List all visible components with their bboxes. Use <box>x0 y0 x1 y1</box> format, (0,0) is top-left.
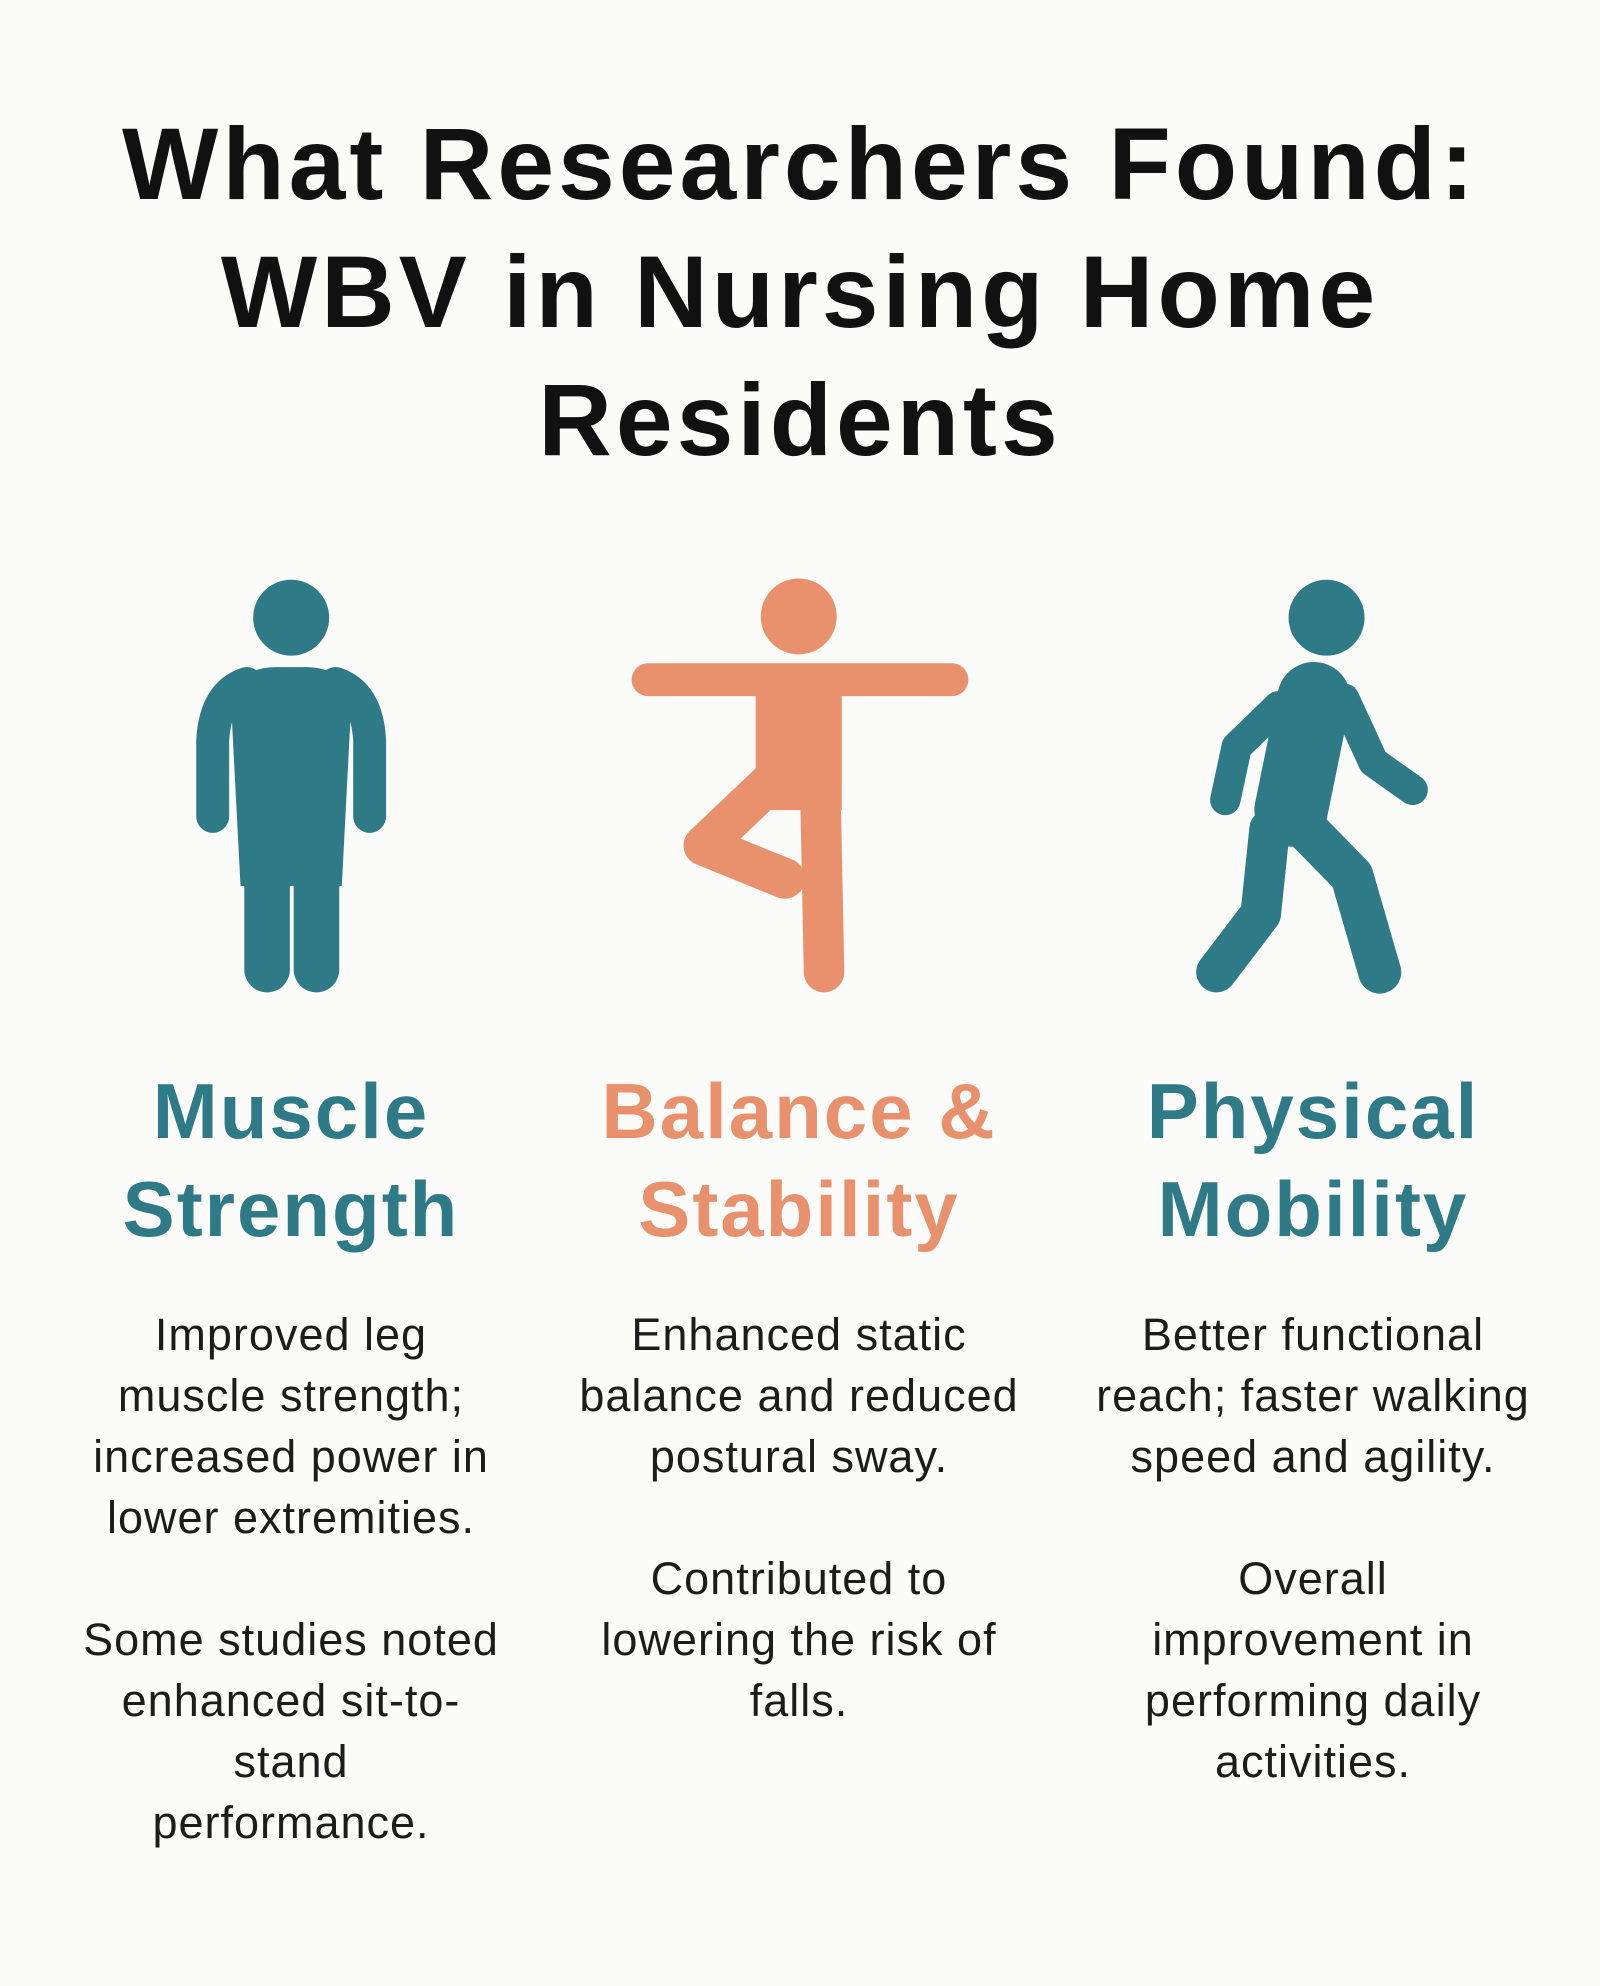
text: balance: Contributed to <box>651 1553 947 1604</box>
panel: physical mobility <box>1096 1067 1530 1787</box>
title: Residents <box>538 363 1062 477</box>
heading: muscle strength <box>123 1067 459 1253</box>
icon: balancing person <box>648 578 952 972</box>
text: balance <box>579 1309 1019 1726</box>
text: mobility: Better functional <box>1142 1309 1484 1360</box>
heading: physical mobility <box>1147 1067 1479 1253</box>
text: mobility: speed and agility. <box>1131 1431 1495 1482</box>
title: What Researchers Found: <box>122 107 1478 221</box>
text: balance: balance and reduced <box>579 1370 1019 1421</box>
text: balance: lowering the risk of <box>601 1614 997 1665</box>
text: muscle strength: muscle strength; <box>118 1370 464 1421</box>
icon: walking person <box>1216 580 1413 972</box>
heading: muscle strength: Muscle <box>153 1067 429 1155</box>
heading: physical mobility: Physical <box>1147 1067 1479 1155</box>
text: muscle strength: stand <box>233 1736 349 1787</box>
text: mobility <box>1096 1309 1530 1787</box>
heading: physical mobility: Mobility <box>1158 1165 1468 1253</box>
text: muscle strength: Improved leg <box>155 1309 427 1360</box>
text: muscle strength: increased power in <box>93 1431 489 1482</box>
text: balance: falls. <box>750 1675 848 1726</box>
panel: muscle strength <box>83 1067 499 1848</box>
heading: balance & stability: Balance & <box>601 1067 997 1155</box>
text: balance: Enhanced static <box>631 1309 967 1360</box>
text: muscle strength <box>83 1309 499 1848</box>
title <box>122 107 1478 477</box>
heading: muscle strength: Strength <box>123 1165 459 1253</box>
title: WBV in Nursing Home <box>221 235 1379 349</box>
icon: standing person <box>213 580 370 970</box>
text: mobility: reach; faster walking <box>1096 1370 1530 1421</box>
text: muscle strength: performance. <box>152 1797 430 1848</box>
text: mobility: Overall <box>1238 1553 1388 1604</box>
text: muscle strength: lower extremities. <box>107 1492 475 1543</box>
heading: balance & stability: Stability <box>638 1165 960 1253</box>
text: muscle strength: enhanced sit-to- <box>122 1675 460 1726</box>
panel: balance & stability <box>579 1067 1019 1726</box>
text: balance: postural sway. <box>650 1431 948 1482</box>
heading: balance & stability <box>601 1067 997 1253</box>
text: mobility: performing daily <box>1145 1675 1481 1726</box>
text: muscle strength: Some studies noted <box>83 1614 499 1665</box>
text: mobility: improvement in <box>1152 1614 1474 1665</box>
text: mobility: activities. <box>1215 1736 1411 1787</box>
